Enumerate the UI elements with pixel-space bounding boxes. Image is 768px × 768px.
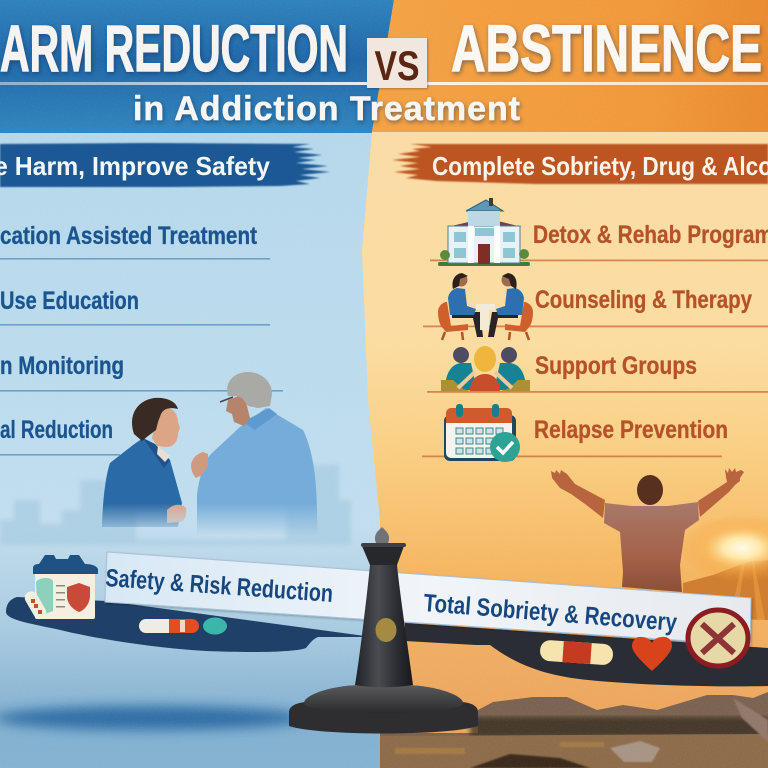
- scale: left pan: [6, 597, 365, 652]
- item: monitoring: n Monitoring: [0, 352, 124, 380]
- icon: calendar: [444, 404, 520, 462]
- figure: arms: [551, 468, 744, 518]
- icon: support group: [441, 346, 530, 391]
- right list rules: [422, 260, 768, 457]
- icon: teal pill: [203, 618, 227, 634]
- background: far mountain: [683, 560, 768, 620]
- icon: heart: [632, 637, 672, 671]
- icon: rehab building: [438, 198, 530, 266]
- VS badge: VS: [374, 42, 420, 89]
- title: left: ARM REDUCTION: [0, 11, 348, 85]
- subtitle: in Addiction Treatment: [133, 90, 520, 128]
- item: safer use education: Use Education: [0, 287, 139, 315]
- scale: right pan: [405, 623, 768, 686]
- background: ground shadow left: [0, 706, 305, 730]
- icon: no symbol: [688, 610, 748, 666]
- banner: right goal: [392, 144, 768, 184]
- icon: safety clipboard: [22, 555, 98, 621]
- icon: counseling: [438, 273, 533, 340]
- person: woman: [102, 398, 186, 527]
- title rule: [0, 82, 768, 85]
- scale: left label: Safety & Risk Reduction: [105, 564, 334, 608]
- background: sun glow: [680, 514, 768, 582]
- banner: left goal: e Harm, Improve Safety: [0, 151, 271, 181]
- banner: left goal: [0, 143, 330, 187]
- icon: capsule right: [539, 640, 614, 666]
- background: rocky ground: [380, 692, 768, 768]
- illustration: person with raised arms: [551, 468, 744, 592]
- scale: right label: Total Sobriety & Recovery: [423, 589, 678, 637]
- scale: [6, 527, 768, 734]
- figure: shirt: [604, 502, 699, 592]
- item: relapse prevention: Relapse Prevention: [534, 416, 728, 444]
- item: reduction: al Reduction: [0, 416, 113, 444]
- background: orange side: [362, 0, 768, 768]
- scale: label bar: [105, 552, 751, 645]
- left list rules: [0, 258, 283, 456]
- figure: head: [637, 475, 663, 505]
- background: blue side: [0, 0, 400, 768]
- list: abstinence: [533, 221, 768, 444]
- item: support groups: Support Groups: [535, 352, 697, 380]
- person: man: [191, 372, 318, 540]
- item: medication assisted treatment: cation Assisted Treatment: [0, 222, 258, 250]
- illustration: two people talking: [102, 372, 318, 540]
- background: city skyline: [0, 465, 351, 545]
- icon: capsule left: [139, 619, 199, 633]
- scale: column: [289, 527, 478, 734]
- list: harm reduction: [0, 222, 258, 444]
